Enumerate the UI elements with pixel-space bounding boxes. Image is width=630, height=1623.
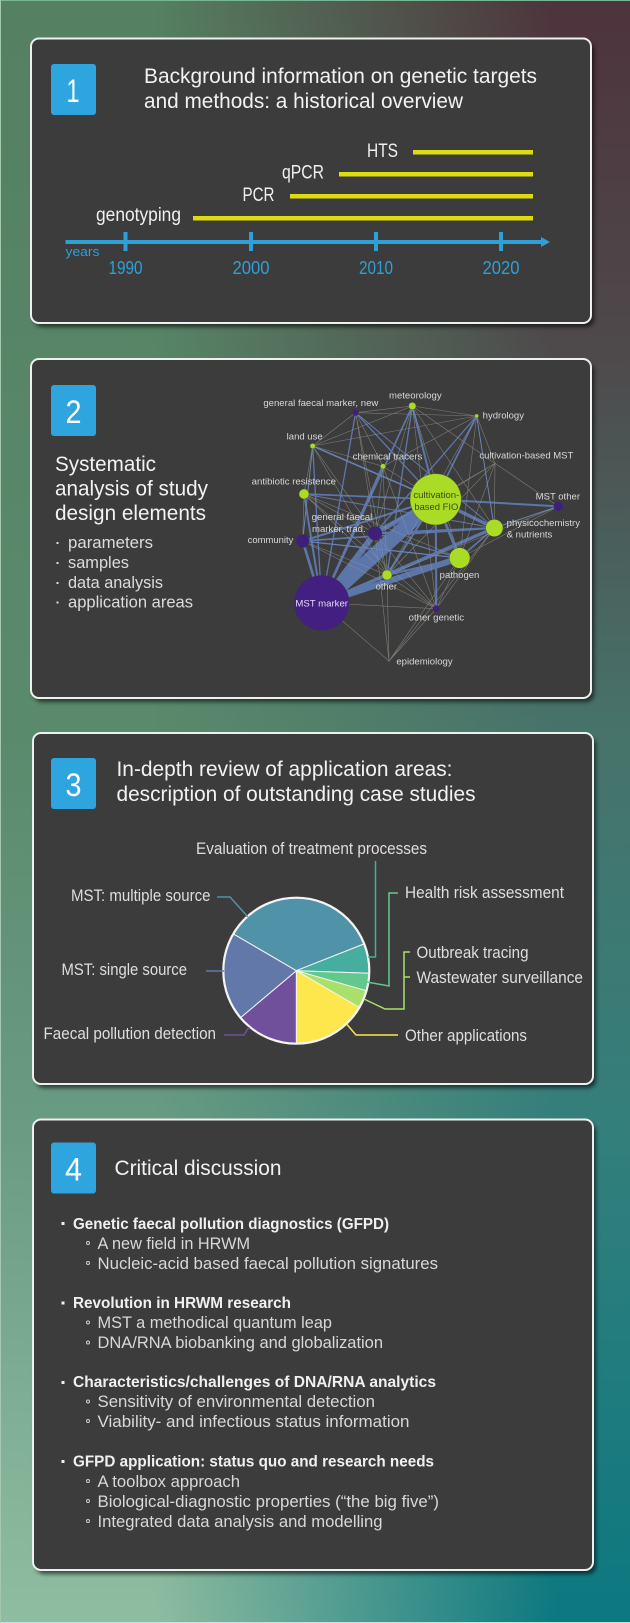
timeline method bars bbox=[96, 141, 533, 226]
pie labels: MST: single source bbox=[62, 961, 187, 979]
network labels: based FIO bbox=[414, 502, 458, 512]
network labels bbox=[248, 391, 580, 666]
heading 3: description of outstanding case studies bbox=[116, 783, 476, 806]
network labels: other genetic bbox=[409, 613, 464, 623]
pie labels: Wastewater surveillance bbox=[416, 969, 583, 987]
network labels: chemical tracers bbox=[353, 451, 423, 461]
discussion group 2 bbox=[62, 1295, 383, 1352]
badge 4 bbox=[51, 1142, 96, 1194]
heading 2: analysis of study bbox=[55, 478, 208, 500]
timeline axis: 2020 bbox=[482, 257, 520, 278]
list of study design elements: application areas bbox=[68, 594, 193, 612]
pie labels: Evaluation of treatment processes bbox=[196, 840, 427, 858]
panel 3: application areas bbox=[33, 733, 596, 1088]
heading 4: Critical discussion bbox=[114, 1157, 282, 1180]
network labels: community bbox=[248, 535, 294, 545]
pie chart bbox=[223, 898, 369, 1044]
pie labels: Faecal pollution detection bbox=[44, 1025, 216, 1043]
network labels: general faecal bbox=[312, 512, 372, 522]
list of study design elements: data analysis bbox=[68, 574, 163, 592]
discussion group 1 bbox=[62, 1216, 438, 1273]
timeline method bars: HTS bbox=[367, 141, 398, 162]
network labels: marker, trad. bbox=[312, 524, 366, 534]
network labels: meteorology bbox=[389, 391, 442, 401]
network labels: cultivation-based MST bbox=[479, 451, 574, 461]
discussion group 4: GFPD application: status quo and research needs bbox=[73, 1454, 434, 1470]
badge 2: 2 bbox=[66, 394, 82, 430]
heading 1: and methods: a historical overview bbox=[144, 90, 464, 113]
network labels: & nutrients bbox=[507, 530, 553, 540]
network labels: other bbox=[376, 581, 397, 591]
network nodes bbox=[294, 402, 563, 662]
discussion group 1: A new field in HRWM bbox=[98, 1235, 250, 1253]
badge 1: 1 bbox=[66, 73, 80, 109]
list of study design elements: parameters bbox=[68, 534, 153, 552]
pie labels bbox=[44, 840, 583, 1045]
badge 3 bbox=[51, 758, 96, 809]
timeline axis: 1990 bbox=[108, 257, 142, 278]
panel 4: critical discussion bbox=[33, 1120, 596, 1574]
pie leader lines bbox=[206, 861, 410, 1035]
discussion group 3: Viability- and infectious status information bbox=[98, 1413, 410, 1431]
timeline axis: 2010 bbox=[359, 257, 393, 278]
discussion group 2: DNA/RNA biobanking and globalization bbox=[98, 1334, 383, 1352]
pie labels: MST: multiple source bbox=[71, 887, 210, 905]
discussion group 4: Biological-diagnostic properties (“the big five”) bbox=[98, 1493, 439, 1511]
heading 3: In-depth review of application areas: bbox=[116, 758, 452, 781]
timeline method bars: PCR bbox=[242, 185, 274, 206]
discussion group 4: Integrated data analysis and modelling bbox=[98, 1513, 382, 1531]
heading 1: Background information on genetic targets bbox=[144, 65, 537, 88]
discussion group 1: Nucleic-acid based faecal pollution signatures bbox=[98, 1255, 438, 1273]
heading 2: design elements bbox=[55, 502, 206, 525]
discussion group 2: Revolution in HRWM research bbox=[73, 1295, 291, 1312]
network labels: antibiotic resistence bbox=[252, 477, 336, 487]
network labels: physicochemistry bbox=[507, 518, 580, 528]
discussion group 4: A toolbox approach bbox=[98, 1473, 240, 1491]
timeline axis: years bbox=[66, 244, 100, 259]
discussion group 2: MST a methodical quantum leap bbox=[98, 1314, 332, 1332]
discussion group 1: Genetic faecal pollution diagnostics (GFPD) bbox=[73, 1216, 389, 1233]
badge 1 bbox=[51, 64, 96, 115]
timeline method bars: qPCR bbox=[282, 162, 324, 184]
network labels: hydrology bbox=[483, 410, 524, 420]
network labels: epidemiology bbox=[396, 656, 453, 666]
list of study design elements: samples bbox=[68, 554, 129, 572]
panel 1: historical overview bbox=[31, 38, 594, 327]
pie labels: Outbreak tracing bbox=[416, 944, 528, 962]
network labels: cultivation- bbox=[413, 490, 459, 500]
network labels: land use bbox=[287, 431, 323, 441]
network labels: pathogen bbox=[440, 570, 479, 580]
badge 2 bbox=[51, 385, 96, 436]
pie labels: Other applications bbox=[405, 1027, 527, 1045]
network labels: MST marker bbox=[295, 598, 348, 608]
panel 2: systematic analysis bbox=[31, 359, 594, 702]
badge 4: 4 bbox=[65, 1152, 82, 1188]
heading 2: Systematic bbox=[55, 453, 156, 476]
discussion group 3 bbox=[62, 1374, 436, 1431]
discussion group 4 bbox=[62, 1454, 439, 1531]
discussion group 3: Sensitivity of environmental detection bbox=[98, 1393, 375, 1411]
timeline axis: 2000 bbox=[232, 257, 270, 278]
timeline axis bbox=[66, 232, 550, 278]
network diagram bbox=[248, 391, 580, 666]
timeline method bars: genotyping bbox=[96, 205, 181, 226]
discussion group 3: Characteristics/challenges of DNA/RNA analytics bbox=[73, 1374, 436, 1391]
list of study design elements bbox=[56, 534, 193, 612]
network labels: MST other bbox=[536, 491, 580, 501]
pie labels: Health risk assessment bbox=[405, 884, 564, 902]
network labels: general faecal marker, new bbox=[263, 398, 379, 408]
badge 3: 3 bbox=[66, 767, 82, 803]
